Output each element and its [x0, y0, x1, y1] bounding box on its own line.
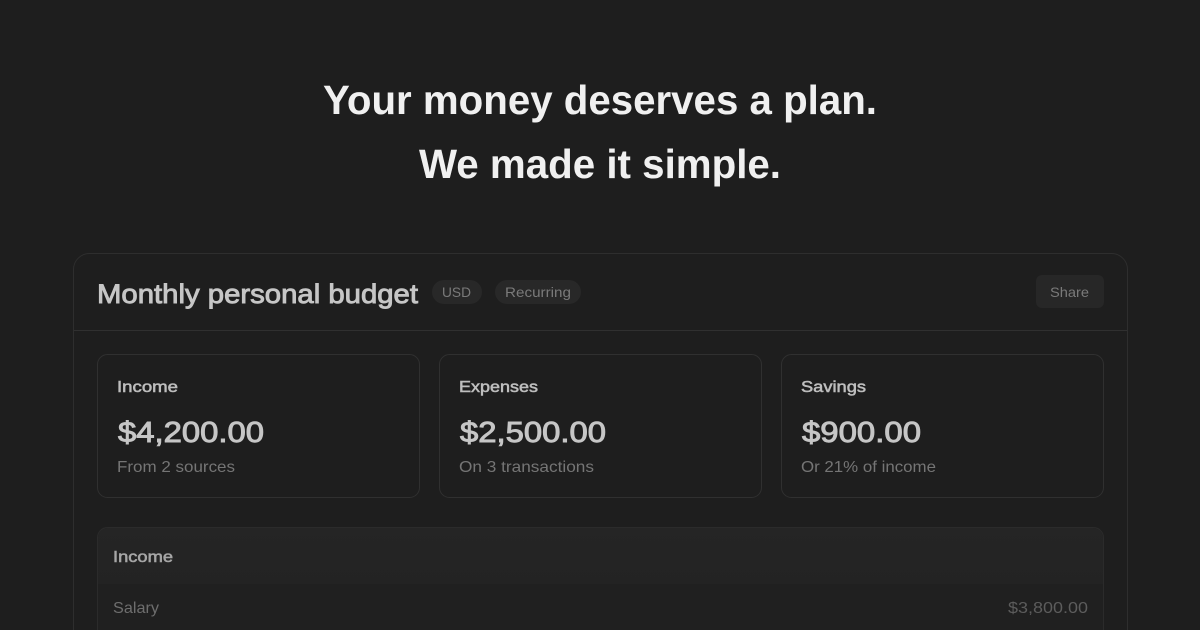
card: expenses summary [440, 354, 762, 498]
card: income summary: From 2 sources [117, 459, 235, 476]
card: savings summary: Savings [801, 379, 866, 396]
title: We made it simple. [419, 141, 781, 187]
card: expenses summary: $2,500.00 [460, 417, 606, 449]
badge: USD [432, 280, 482, 304]
card: expenses summary: On 3 transactions [459, 459, 594, 476]
badge: USD: USD [442, 284, 471, 300]
card: savings summary: $900.00 [802, 417, 921, 449]
card: income summary [98, 354, 420, 498]
panel: monthly personal budget [74, 254, 1128, 630]
card: expenses summary: Expenses [459, 379, 538, 396]
table heading: Income [113, 549, 173, 566]
row: salary [113, 600, 1088, 617]
badge: Recurring: Recurring [505, 284, 571, 300]
card: income summary: Income [117, 379, 178, 396]
card: savings summary: Or 21% of income [801, 459, 936, 476]
panel heading: Monthly personal budget [97, 279, 419, 309]
title: Your money deserves a plan. [323, 77, 877, 123]
table: income [98, 528, 1104, 630]
card: income summary: $4,200.00 [118, 417, 264, 449]
badge: Recurring [495, 280, 581, 304]
row: salary: Salary [113, 600, 159, 617]
row: salary: $3,800.00 [1008, 600, 1088, 617]
button: Share: Share [1050, 284, 1089, 300]
title [323, 77, 877, 187]
card: savings summary [782, 354, 1104, 498]
button: Share [1036, 275, 1104, 308]
